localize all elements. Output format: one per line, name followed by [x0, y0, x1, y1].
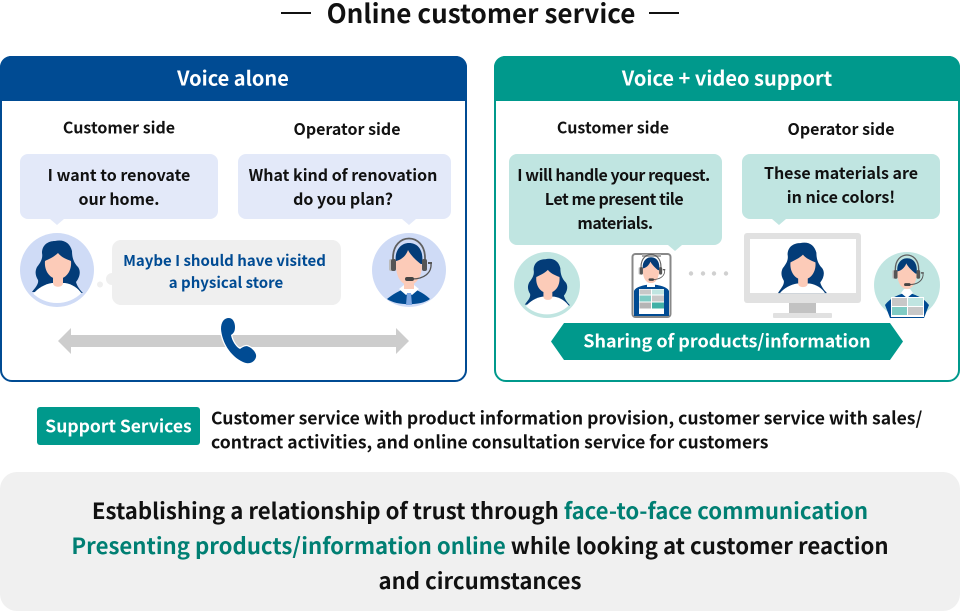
badge: support services: Support Services: [45, 414, 192, 438]
panel header: voice alone: Voice alone: [176, 62, 289, 92]
speech bubble: customer: I want to renovate: [48, 162, 190, 186]
icon: customer avatar: [20, 233, 94, 307]
connection dots: [689, 271, 728, 276]
speech bubble: operator: do you plan?: [293, 186, 393, 210]
panel: conclusion: [0, 472, 960, 611]
speech bubble: operator on phone: materials.: [577, 210, 653, 234]
icon: monitor with customer: [744, 233, 861, 318]
panel: voice + video support: [494, 56, 960, 381]
label: customer side: Customer side: [63, 114, 175, 138]
label: operator side: Operator side: [294, 116, 400, 140]
panel: voice alone: [0, 56, 467, 381]
icon: operator avatar with materials: [874, 252, 940, 318]
thought bubble: customer: [97, 240, 341, 305]
speech bubble: customer on monitor: [742, 154, 940, 225]
text block: support services description: [211, 406, 922, 454]
label: operator side: Operator side: [788, 116, 894, 140]
speech bubble: customer on monitor: These materials are: [764, 160, 918, 184]
label: customer side: Customer side: [557, 114, 669, 138]
icon: operator avatar: [372, 233, 446, 307]
badge: support services: [37, 407, 200, 445]
panel header: voice alone: [0, 56, 467, 101]
arrow banner: sharing of products/information: Sharing of products/information: [583, 328, 871, 354]
arrow: two-way voice link: [58, 328, 409, 354]
text block: support services description: Customer service with product information provision, customer service with sales/: [211, 406, 922, 430]
panel header: voice + video: [494, 56, 960, 101]
speech bubble: customer: our home.: [78, 186, 160, 210]
text block: support services description: contract activities, and online consultation service for customers: [211, 430, 769, 454]
speech bubble: operator on phone: [509, 154, 722, 251]
speech bubble: operator: [238, 154, 451, 225]
conclusion text: Establishing a relationship of trust through face-to-face communication: [92, 494, 868, 526]
icon: telephone: [221, 318, 256, 363]
thought bubble: customer: a physical store: [169, 272, 283, 293]
arrow banner: sharing of products/information: [551, 323, 903, 360]
speech bubble: customer on monitor: in nice colors!: [787, 184, 895, 208]
speech bubble: operator on phone: Let me present tile: [545, 186, 683, 210]
icon: customer avatar: [514, 252, 580, 318]
panel header: voice + video: Voice + video support: [621, 62, 833, 92]
conclusion text: Presenting products/information online while looking at customer reaction: [71, 529, 889, 561]
speech bubble: operator on phone: I will handle your request.: [517, 162, 710, 186]
conclusion text: [71, 494, 889, 596]
conclusion text: and circumstances: [379, 564, 582, 596]
speech bubble: operator: What kind of renovation: [249, 162, 437, 186]
icon: smartphone with operator: [632, 254, 670, 317]
speech bubble: customer: [20, 154, 218, 225]
thought bubble: customer: Maybe I should have visited: [123, 250, 326, 271]
